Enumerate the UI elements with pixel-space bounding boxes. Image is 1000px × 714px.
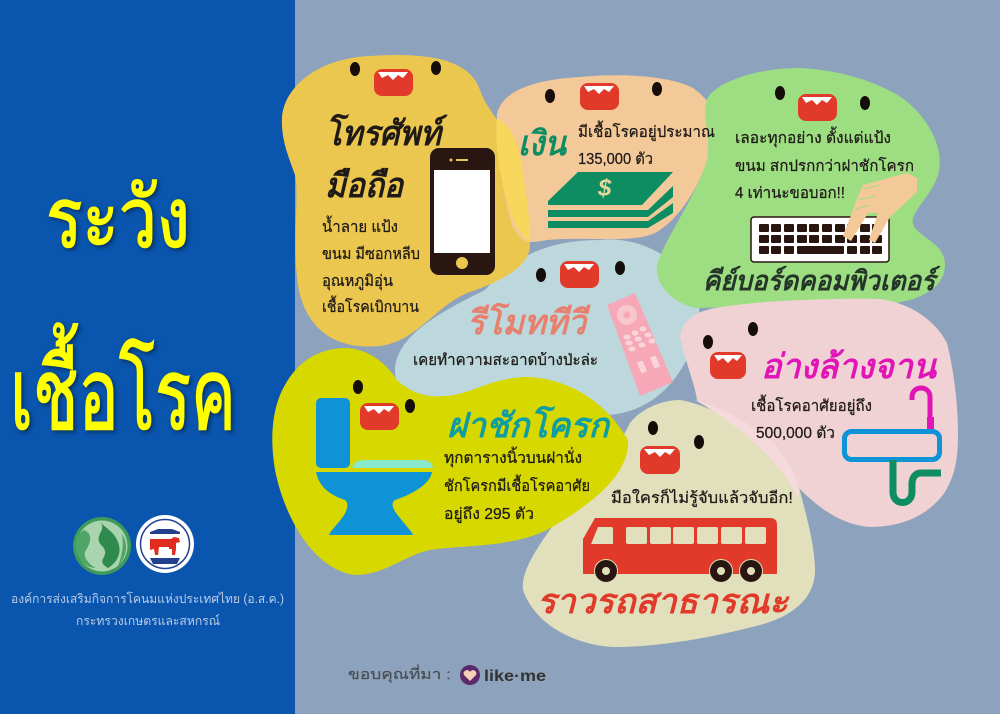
panel: money blob <box>497 75 715 242</box>
title: ระวัง: ระวัง <box>46 171 190 265</box>
heading: toilet seat: ฝาชักโครก <box>447 405 611 445</box>
text: toilet details: ทุกตารางนิ้วบนฝานั่ง <box>444 446 582 468</box>
text: money details: มีเชื้อโรคอยู่ประมาณ <box>578 120 715 142</box>
panel: remote TV blob <box>395 240 700 421</box>
left blue panel <box>0 0 295 714</box>
icon: phone face <box>350 61 441 96</box>
heading: sink: อ่างล้างจาน <box>761 348 938 386</box>
panel: public transit blob <box>523 400 815 647</box>
icon: toilet face <box>353 380 415 430</box>
logo: dairy organisation <box>136 515 194 573</box>
text: toilet details: อยู่ถึง 295 ตัว <box>444 506 534 524</box>
panel: toilet seat blob <box>272 348 628 575</box>
text: phone details: ขนม มีซอกหลีบ <box>322 246 420 263</box>
heading: remote: รีโมททีวี <box>467 302 591 342</box>
icon: bus <box>583 518 777 582</box>
text: phone details: เชื้อโรคเบิกบาน <box>322 295 419 316</box>
text: keyboard details <box>735 126 914 202</box>
icon: smartphone <box>430 148 495 275</box>
heading: public transit: ราวรถสาธารณะ <box>537 583 790 621</box>
icon: money face <box>545 82 662 110</box>
icon: like me logo: like·me <box>484 668 546 685</box>
text: sink details: 500,000 ตัว <box>756 425 835 442</box>
icon: keyboard face <box>775 86 870 121</box>
text: money details: 135,000 ตัว <box>578 151 653 168</box>
text: toilet details <box>444 446 590 524</box>
text: phone details: อุณหภูมิอุ่น <box>322 273 393 291</box>
icon: keyboard <box>751 217 889 262</box>
icon: money stack: $ <box>597 175 612 202</box>
icon: money stack <box>548 172 673 228</box>
panel: keyboard blob <box>657 68 945 308</box>
text: phone details: น้ำลาย แป้ง <box>322 215 398 236</box>
panel: phone blob <box>282 55 530 347</box>
icon: remote control <box>607 293 673 396</box>
title: เชื้อโรค: เชื้อโรค <box>10 323 236 451</box>
heading: phone: โทรศัพท์ <box>325 113 448 153</box>
organisation name <box>11 591 284 628</box>
heading: money: เงิน <box>518 125 568 163</box>
credit: ขอบคุณที่มา : <box>348 665 451 683</box>
text: phone details <box>322 215 420 316</box>
heading: keyboard: คีย์บอร์ดคอมพิวเตอร์ <box>703 265 941 296</box>
text: keyboard details: เลอะทุกอย่าง ตั้งแต่แป้ง <box>735 126 891 148</box>
text: sink details: เชื้อโรคอาศัยอยู่ถึง <box>751 394 872 416</box>
heading: mobile: มือถือ <box>325 167 404 205</box>
text: bus details: มือใครก็ไม่รู้จับแล้วจับอีก! <box>611 488 793 508</box>
panel: sink blob <box>680 299 958 527</box>
icon: like me logo <box>460 665 546 685</box>
icon: bus face <box>640 421 704 474</box>
text: keyboard details: ขนม สกปรกกว่าฝาชักโครก <box>735 157 914 175</box>
icon: remote face <box>536 261 625 288</box>
overlap highlight: sink over transit <box>695 400 799 500</box>
text: keyboard details: 4 เท่านะขอบอก!! <box>735 185 845 202</box>
logo: green seal <box>73 517 131 575</box>
text: money details <box>578 120 715 168</box>
text: sink details <box>751 394 872 442</box>
text: remote details: เคยทำความสะอาดบ้างป่ะล่ะ <box>413 352 598 369</box>
icon: sink <box>844 388 941 502</box>
overlap highlight: phone over money <box>496 118 530 243</box>
icon: hand <box>843 173 917 243</box>
text: toilet details: ชักโครกมีเชื้อโรคอาศัย <box>444 474 590 495</box>
icon: toilet <box>316 398 433 535</box>
organisation name: องค์การส่งเสริมกิจการโคนมแห่งประเทศไทย (อ.ส.ค.) <box>11 591 284 606</box>
icon: sink face <box>703 322 758 379</box>
organisation name: กระทรวงเกษตรและสหกรณ์ <box>76 614 220 628</box>
